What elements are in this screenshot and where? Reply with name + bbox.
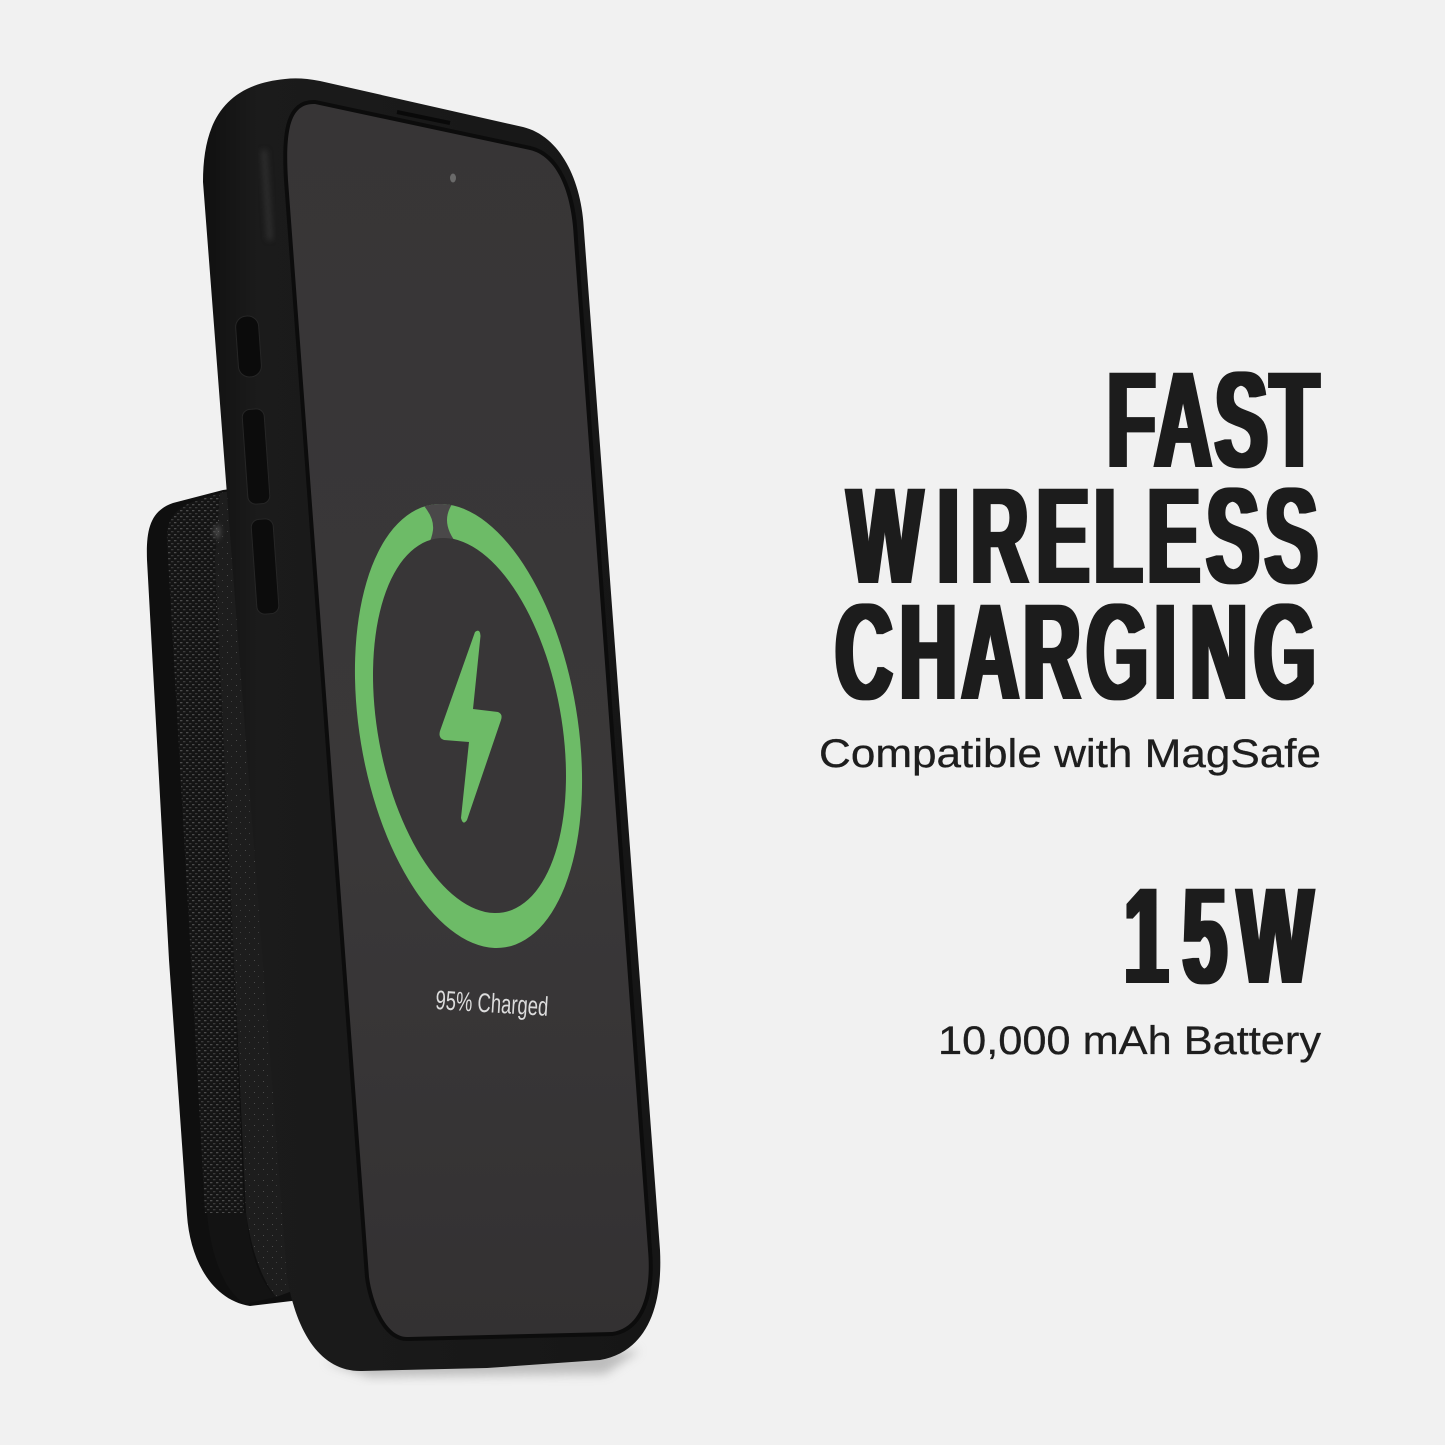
power bank glint [214,525,220,539]
feature heading [835,343,1319,728]
phone in case [203,78,660,1371]
lightning bolt icon [440,631,502,823]
case side highlight [264,150,270,240]
power bank lower edge [207,1213,276,1304]
magsafe subtext: Compatible with MagSafe [819,732,1321,776]
ring gap [424,504,454,540]
infographic canvas [146,78,1322,1382]
charge status label: 95% Charged [435,985,549,1022]
wattage figure: 15W [1124,859,1313,1012]
ring inner [345,522,594,929]
front camera [450,174,456,182]
magnetic power bank [147,480,300,1306]
charging ring [354,504,582,948]
power bank fabric band [167,493,244,1213]
phone case body [203,78,660,1371]
power bank body [147,480,300,1306]
speaker notch [397,112,450,123]
heading line: wireless: WIRELESS [847,459,1318,612]
phone screen [287,104,649,1337]
screen rim [287,104,649,1337]
action button [235,315,262,378]
heading line: charging: CHARGING [835,575,1316,728]
product shadow [325,1350,640,1377]
battery capacity subtext: 10,000 mAh Battery [938,1019,1321,1063]
heading line: fast: FAST [1107,343,1319,496]
volume up button [242,408,270,505]
power bank glossy edge [215,490,295,1297]
volume down button [251,518,279,615]
ring outer [324,487,613,965]
